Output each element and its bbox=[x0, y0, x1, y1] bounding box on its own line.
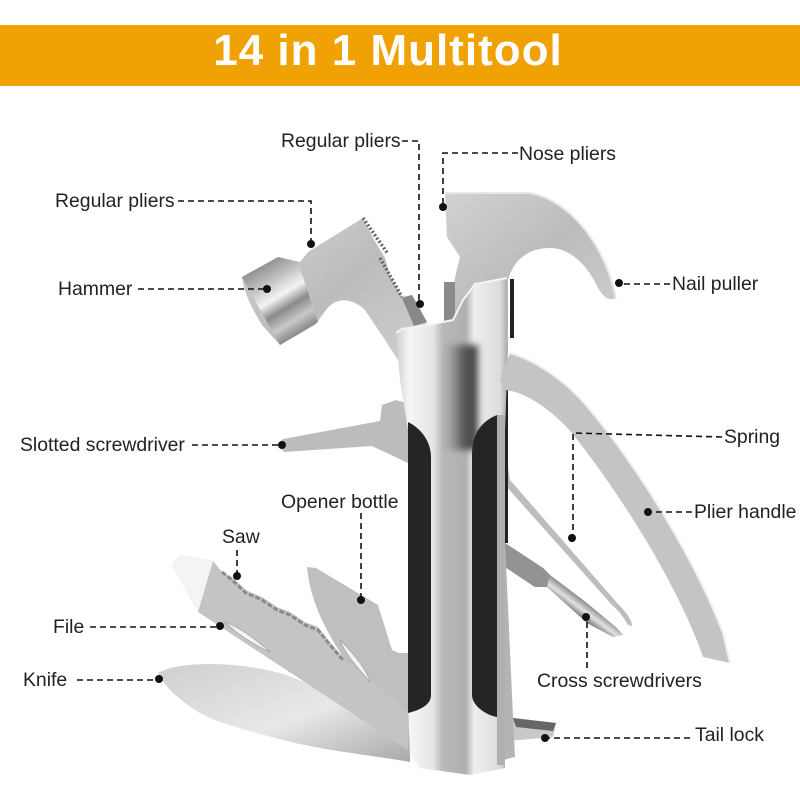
label: Knife: Knife bbox=[23, 669, 67, 691]
label: Cross screwdrivers bbox=[537, 613, 702, 692]
label: Nose pliers: Nose pliers bbox=[519, 143, 616, 165]
label: Saw bbox=[222, 526, 261, 580]
main handle body bbox=[396, 278, 508, 775]
dark pivot piece bbox=[444, 282, 455, 322]
label: Plier handle bbox=[644, 501, 796, 523]
tool: slotted screwdriver bbox=[278, 400, 410, 464]
label: Regular pliers top: Regular pliers bbox=[281, 130, 401, 152]
title banner: 14 in 1 Multitool bbox=[213, 26, 563, 75]
label: Slotted screwdriver: Slotted screwdriver bbox=[20, 434, 185, 456]
tool: knife blade bbox=[158, 664, 410, 762]
handle right rim bbox=[497, 415, 505, 765]
tool: spring bbox=[503, 433, 632, 626]
claw top highlight bbox=[445, 193, 616, 298]
label: Opener bottle: Opener bottle bbox=[281, 491, 398, 513]
tool: left hammer head bbox=[242, 218, 427, 363]
label: Cross screwdrivers: Cross screwdrivers bbox=[537, 670, 702, 692]
tool: cross screwdriver bbox=[505, 543, 623, 637]
hammer jaw teeth bbox=[363, 218, 402, 297]
label: Nail puller bbox=[615, 273, 759, 295]
lower wedge behind handle bbox=[503, 540, 515, 760]
file tip highlight bbox=[172, 555, 213, 612]
label: Hammer: Hammer bbox=[58, 278, 133, 300]
label: Knife bbox=[23, 669, 163, 691]
label: Hammer bbox=[58, 278, 271, 300]
label: File: File bbox=[53, 616, 84, 638]
tool: right hammer claw bbox=[445, 193, 616, 330]
label: Spring: Spring bbox=[724, 426, 780, 448]
label: Saw: Saw bbox=[222, 526, 261, 548]
jaw insert bbox=[402, 295, 427, 326]
plier handle highlight bbox=[510, 353, 730, 663]
label: Plier handle: Plier handle bbox=[694, 501, 796, 523]
label: Opener bottle bbox=[281, 491, 398, 604]
tool: plier handle bbox=[500, 353, 730, 663]
handle top edge highlight bbox=[396, 278, 507, 333]
label: Regular pliers left: Regular pliers bbox=[55, 190, 175, 212]
tool: saw and file blade bbox=[172, 555, 408, 750]
label: Tail lock bbox=[541, 724, 764, 746]
label: Nose pliers bbox=[439, 143, 616, 211]
tool: tail lock bbox=[497, 718, 556, 742]
label: Regular pliers left bbox=[55, 190, 315, 248]
opener slot bbox=[340, 640, 370, 682]
label: Regular pliers top bbox=[281, 130, 424, 308]
multitool illustration bbox=[158, 193, 730, 775]
label: Nail puller: Nail puller bbox=[672, 273, 759, 295]
saw teeth detail bbox=[222, 572, 343, 660]
hammer striking cylinder bbox=[242, 257, 318, 345]
black grip left bbox=[408, 422, 431, 713]
tool: bottle opener blade bbox=[307, 567, 408, 712]
label: Spring bbox=[568, 426, 780, 542]
label: File bbox=[53, 616, 224, 638]
black grip right bbox=[472, 415, 497, 717]
label: Slotted screwdriver bbox=[20, 434, 286, 456]
handle dark centre band bbox=[442, 345, 478, 450]
file slot bbox=[225, 622, 270, 652]
title banner bbox=[0, 25, 800, 86]
dark back edges bbox=[505, 279, 514, 543]
label: Tail lock: Tail lock bbox=[695, 724, 764, 746]
